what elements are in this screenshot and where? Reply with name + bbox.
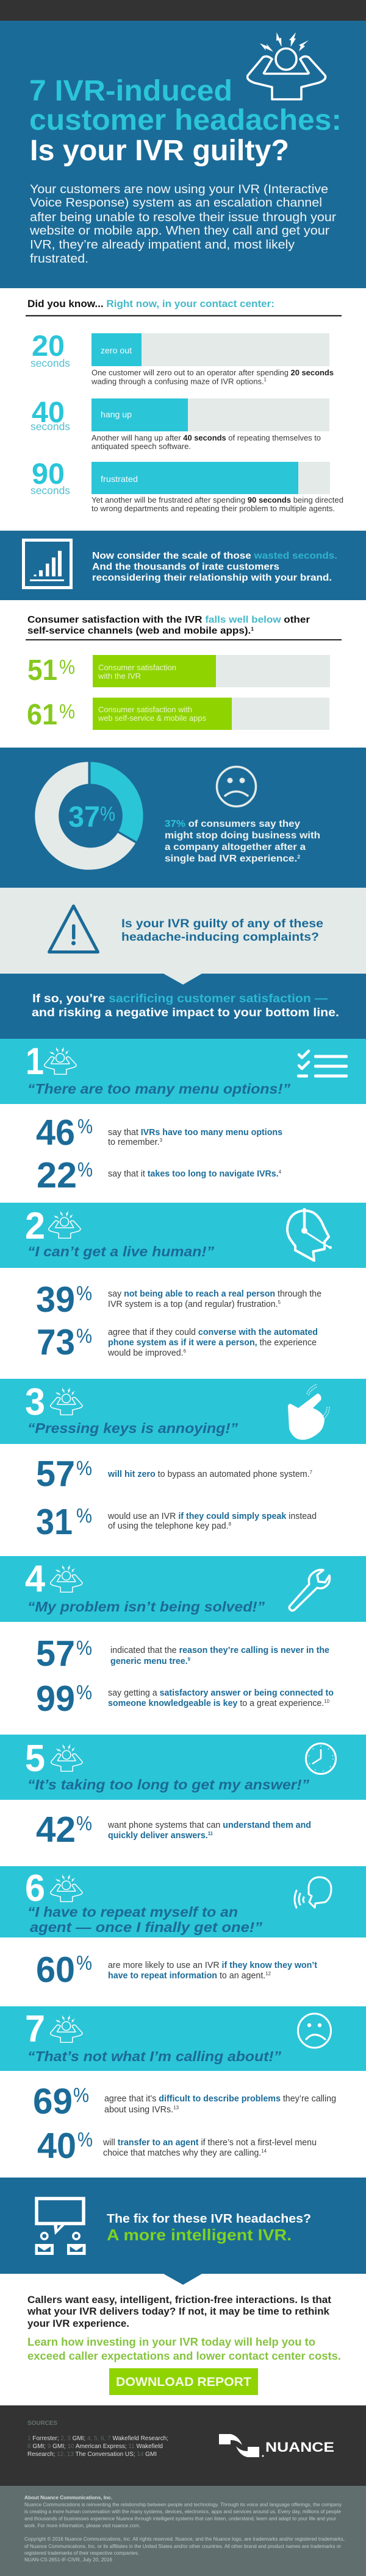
text: about body: Nuance Communications is reinventing the relationship between people and technology. Through its voice and language offerings, the company: [24, 2502, 342, 2508]
stat: 60 percent: have to repeat information to an agent.: [108, 1971, 267, 1981]
stat: 40 seconds: antiquated speech software.: [92, 442, 191, 451]
icon: headache person: [247, 32, 326, 99]
text: stop doing business: single bad IVR experience.: [165, 854, 289, 864]
text: copyright: [24, 2536, 345, 2563]
stat: 73 percent: phone system as if it were a person, the experience: [108, 1338, 317, 1348]
quote 4: “My problem isn’t being solved!”: [27, 1599, 265, 1615]
text: callers want: Callers want easy, intelligent, friction-free interactions. Is that: [27, 2295, 332, 2305]
stat: 40 percent: will transfer to an agent if there’s not a first-level menu: [102, 2138, 317, 2148]
icon: warning triangle: [49, 906, 98, 952]
icon: headache: [51, 1744, 82, 1771]
stat: 42 percent: [36, 1810, 311, 1850]
stat: 57 percent menu tree: [36, 1633, 329, 1674]
stat: 99 percent: [36, 1679, 334, 1719]
stat: 69 percent: 69: [33, 2081, 73, 2121]
title: customer headaches:: [29, 104, 342, 136]
stat: 46 percent: 3: [160, 1138, 163, 1143]
text: copyright: Copyright © 2016 Nuance Communications, Inc. All rights reserved. Nuance, and the Nuance logo, are trademarks and/or registered trademarks,: [24, 2536, 345, 2542]
stat: 99 percent: 99: [36, 1679, 75, 1719]
stat: 40 seconds: Another will hang up after 40 seconds of repeating themselves to: [92, 433, 321, 442]
stat: 99 percent: 10: [324, 1699, 330, 1704]
stat: 57 percent bypass: will hit zero to bypass an automated phone system.: [108, 1470, 312, 1479]
intro text: Voice Response) system as an escalation channel: [30, 196, 322, 210]
bar: 51 percent: Consumer satisfaction: [98, 663, 176, 672]
donut chart: 37 percent: 37: [68, 801, 100, 833]
panel: sources: [0, 2405, 366, 2486]
heading: sources: SOURCES: [27, 2419, 57, 2427]
icon: headache: [51, 1387, 82, 1415]
icon: headache: [45, 1047, 76, 1074]
panel: about and legal: [0, 2486, 366, 2576]
stat: 39 percent: %: [76, 1282, 92, 1304]
icon: bar chart: [23, 540, 71, 587]
stat: 40 seconds: 40: [32, 397, 65, 429]
stat: 69 percent: about using IVRs.: [104, 2105, 174, 2115]
text: about body: is creating a more human conversation with the many systems, devices, electronics, apps and services around us. Every day, millions of people: [24, 2508, 341, 2514]
text: wasted seconds: And the thousands of irate customers: [92, 562, 279, 572]
stat: 22 percent: [37, 1155, 282, 1195]
stat: 99 percent: %: [76, 1681, 92, 1704]
stat: 90 seconds: to wrong departments and repeating their problem to multiple agents.: [92, 504, 335, 513]
text: learn how: [27, 2335, 341, 2362]
stat: 20 seconds: wading through a confusing maze of IVR options.: [92, 377, 264, 386]
stat: 57 percent bypass: 57: [36, 1454, 75, 1494]
stat: 99 percent: say getting a satisfactory answer or being connected to: [108, 1688, 334, 1698]
stat: 40 percent: choice that matches why they are calling.: [103, 2148, 264, 2158]
text: sacrificing satisfaction: [32, 992, 339, 1019]
panel: complaint 3: [0, 1379, 366, 1444]
text: learn how: exceed caller expectations and lower contact center costs.: [27, 2349, 341, 2362]
panel: complaint 5: [0, 1735, 366, 1800]
panel: complaint 6: [0, 1866, 366, 1937]
quote 7: “That’s not what I’m calling about!”: [27, 2048, 281, 2064]
text: stop doing business: a company altogether after a: [165, 842, 306, 852]
quote 3: “Pressing keys is annoying!”: [27, 1420, 238, 1436]
text: learn how: Learn how investing in your IVR today will help you to: [27, 2335, 315, 2348]
stat: 42 percent: 42: [36, 1810, 76, 1850]
stat: 90 seconds: seconds: [30, 484, 70, 497]
text: is your IVR guilty: headache-inducing complaints?: [121, 930, 319, 944]
icon: headache: [51, 2015, 82, 2042]
stat: 40 seconds: hang up: [101, 409, 132, 419]
text: about body: [24, 2502, 342, 2528]
bar: 51 percent: [27, 654, 330, 687]
stat: 57 percent menu tree: indicated that the reason they’re calling is never in the: [110, 1646, 329, 1655]
panel: complaint 7: [0, 2006, 366, 2071]
text: stop doing business: [165, 819, 320, 864]
text: the fix: A more intelligent IVR.: [107, 2226, 292, 2244]
icon: sad face: [217, 766, 256, 807]
icon: headache: [51, 1565, 82, 1592]
icon: checklist: [297, 1051, 348, 1077]
text: stop doing business: 37% of consumers say they: [165, 819, 300, 829]
quote 5: “It’s taking too long to get my answer!”: [27, 1777, 309, 1792]
number 4: 4: [25, 1558, 45, 1600]
stat: 40 percent: 40: [37, 2126, 76, 2166]
stat: 20 seconds: zero out: [101, 345, 132, 355]
icon: clock: [306, 1744, 336, 1774]
text: copyright: registered trademarks of their respective companies.: [24, 2550, 139, 2556]
panel: complaint 2: [0, 1203, 366, 1268]
stat: 22 percent: 22: [37, 1155, 77, 1195]
text: wasted seconds: Now consider the scale of those wasted seconds.: [92, 551, 337, 561]
button: download report: [109, 2368, 258, 2395]
panel: the fix: [0, 2178, 366, 2285]
stat: 20 seconds: 20: [32, 330, 65, 363]
text: the fix: The fix for these IVR headaches?: [107, 2212, 311, 2226]
stat: 69 percent: 13: [173, 2105, 179, 2111]
text: stop doing business: might stop doing business with: [165, 830, 320, 841]
text: source list: Research; 12, 13 The Conversation US; 14 GMI: [27, 2450, 157, 2458]
bar: 61 percent: 61: [27, 699, 57, 731]
stat: 60 percent: 60: [36, 1950, 75, 1990]
stat: 73 percent: %: [76, 1325, 92, 1347]
panel: wasted seconds: [0, 531, 366, 600]
stat: 20 seconds: One customer will zero out to an operator after spending 20 seconds: [92, 368, 334, 377]
stat: 69 percent: %: [73, 2084, 89, 2106]
number 2: 2: [25, 1205, 45, 1247]
panel: sacrificing customer satisfaction: [0, 974, 366, 1039]
button: download report: DOWNLOAD REPORT: [116, 2375, 251, 2389]
stat: 99 percent: someone knowledgeable is key to a great experience.: [108, 1699, 326, 1708]
stat: 90 seconds: frustrated: [101, 474, 138, 484]
stat: 60 percent: 12: [265, 1971, 271, 1976]
stat: 73 percent: would be improved.: [108, 1348, 185, 1358]
stat: 31 percent: 31: [36, 1502, 73, 1542]
stat: 46 percent: 46: [36, 1113, 75, 1153]
stat: 22 percent: 4: [279, 1169, 282, 1175]
stat: 39 percent: say not being able to reach a real person through the: [108, 1289, 321, 1299]
text: copyright: of Nuance Communications, Inc. or its affiliates in the United States and/or other countries. All other brand and product names are trademarks or: [24, 2543, 341, 2549]
stat: 60 percent: [36, 1950, 317, 1990]
number 7: 7: [25, 2008, 45, 2050]
text: source list: 8 GMI; 9 GMI; 10 American Express; 11 Wakefield: [27, 2443, 163, 2450]
stat: 57 percent menu tree: generic menu tree.: [110, 1657, 189, 1666]
stat: 57 percent bypass: 7: [310, 1470, 313, 1475]
icon: pressing finger: [288, 1384, 329, 1440]
title: [29, 75, 342, 167]
icon: speech bubble and people: [35, 2198, 85, 2255]
quote 6: [27, 1904, 262, 1935]
stat: 73 percent: agree that if they could converse with the automated: [108, 1328, 318, 1337]
quote 1: “There are too many menu options!”: [27, 1081, 290, 1097]
heading: consumer satisfaction: 1: [251, 626, 254, 632]
text: wasted seconds: [92, 551, 337, 583]
icon: headache: [51, 1874, 82, 1902]
text: callers want: [27, 2295, 332, 2329]
stat: 39 percent: [36, 1279, 321, 1320]
stat: 57 percent menu tree: %: [76, 1637, 92, 1659]
heading: consumer satisfaction: [27, 615, 310, 636]
stat: 46 percent: [36, 1113, 282, 1153]
stat: 60 percent: %: [76, 1951, 92, 1974]
number 6: 6: [25, 1867, 45, 1909]
stat: 31 percent: 8: [229, 1521, 232, 1527]
panel: complaint 4: [0, 1556, 366, 1622]
stat: 46 percent: %: [77, 1115, 93, 1138]
quote 6: agent — once I finally get one!”: [30, 1919, 262, 1935]
stat: 20 seconds: seconds: [30, 357, 70, 369]
panel: 37 percent: [0, 748, 366, 888]
stat: 42 percent: quickly deliver answers.: [108, 1831, 210, 1841]
stat: 40 percent: %: [77, 2128, 93, 2151]
text: the fix: [107, 2212, 311, 2244]
text: about heading: About Nuance Communications, Inc.: [24, 2494, 112, 2500]
text: sacrificing satisfaction: If so, you’re sacrificing customer satisfaction —: [32, 992, 328, 1005]
stat: 22 percent: %: [77, 1158, 93, 1181]
stat: 42 percent: %: [76, 1812, 92, 1835]
icon: wrench: [289, 1569, 329, 1611]
stat: 20 seconds: 1: [264, 377, 267, 383]
stat: 57 percent bypass: %: [76, 1457, 92, 1479]
heading: consumer satisfaction: Consumer satisfaction with the IVR falls well below other: [27, 615, 310, 625]
stat: 39 percent: IVR system is a top (and regular) frustration.: [108, 1300, 281, 1309]
stat: 90 seconds: 90: [32, 458, 65, 490]
stat: 57 percent menu tree: 9: [188, 1657, 191, 1662]
stat: 57 percent menu tree: 57: [36, 1633, 75, 1674]
stat: 40 seconds: [30, 397, 329, 451]
panel: consumer satisfaction: [26, 615, 342, 731]
intro text: after being unable to resolve their issue through your: [30, 210, 336, 224]
stat: 57 percent bypass: [36, 1454, 313, 1494]
number 5: 5: [25, 1738, 45, 1780]
bar: 51 percent: with the IVR: [98, 671, 141, 681]
panel: did you know: [26, 299, 343, 513]
bar: 61 percent: %: [59, 700, 75, 723]
intro text: [29, 182, 336, 266]
stat: 46 percent: say that IVRs have too many menu options: [108, 1128, 282, 1138]
icon: sad face: [298, 2014, 331, 2048]
stat: 73 percent: 6: [184, 1348, 187, 1354]
title: Is your IVR guilty?: [30, 135, 289, 167]
stat: 40 seconds: seconds: [30, 420, 70, 433]
stat: 39 percent: 39: [36, 1279, 75, 1320]
text: source list: [27, 2435, 168, 2458]
stat: 42 percent: want phone systems that can understand them and: [107, 1821, 311, 1830]
icon: headache: [49, 1211, 81, 1238]
title: 7 IVR-induced: [29, 75, 232, 107]
text: about body: and thousands of businesses experience Nuance through intelligent systems that can listen, understand, learn and adapt to your life and your: [24, 2515, 336, 2521]
stat: 73 percent: 73: [37, 1322, 75, 1362]
text: wasted seconds: reconsidering their relationship with your brand.: [92, 573, 332, 583]
bar: 61 percent: Consumer satisfaction with: [98, 705, 192, 714]
bar: 61 percent: [27, 698, 329, 731]
intro text: Your customers are now using your IVR (Interactive: [30, 182, 328, 196]
stat: 40 percent: 14: [261, 2148, 267, 2154]
text: stop doing business: 2: [297, 854, 301, 860]
bar: 61 percent: web self-service & mobile apps: [98, 713, 206, 723]
text: callers want: what your IVR delivers today? If not, it may be time to rethink: [27, 2306, 330, 2317]
logo: nuance: NUANCE: [265, 2440, 334, 2455]
stat: 90 seconds: [30, 458, 343, 513]
text: copyright: NUAN-CS-2651-IF-CIVR, July 20, 2016: [24, 2557, 112, 2563]
text: is your IVR guilty: [121, 917, 323, 944]
text: callers want: your IVR experience.: [27, 2318, 129, 2329]
text: is your IVR guilty: Is your IVR guilty of any of these: [121, 917, 323, 930]
stat: 31 percent: would use an IVR if they could simply speak instead: [107, 1512, 317, 1521]
quote 2: “I can’t get a live human!”: [27, 1244, 214, 1259]
stat: 39 percent: 5: [278, 1300, 281, 1305]
stat: 40 percent: [37, 2126, 317, 2166]
panel: complaint 1: [0, 1039, 366, 1104]
stat: 31 percent: [36, 1502, 317, 1542]
logo: nuance: [219, 2434, 334, 2457]
stat: 22 percent: say that it takes too long to navigate IVRs.: [108, 1169, 281, 1179]
icon: headset clock: [287, 1208, 332, 1261]
heading: did you know: Did you know... Right now, in your contact center:: [27, 299, 274, 310]
bar: 51 percent: 51: [27, 654, 57, 687]
bar: 51 percent: %: [59, 656, 75, 678]
stat: 46 percent: to remember.: [108, 1138, 160, 1147]
stat: 69 percent: agree that it’s difficult to describe problems they’re calling: [104, 2094, 336, 2104]
donut chart: 37 percent: %: [100, 802, 115, 825]
intro text: website or mobile app. When they call and get your: [29, 224, 329, 238]
text: source list: 1 Forrester; 2, 3 GMI; 4, 5, 6, 7 Wakefield Research;: [27, 2435, 168, 2442]
stat: 31 percent: %: [76, 1504, 92, 1527]
stat: 73 percent: [37, 1322, 318, 1362]
stat: 69 percent: [33, 2081, 336, 2121]
stat: 60 percent: are more likely to use an IVR if they know they won’t: [108, 1961, 317, 1970]
text: about body: work. For more information, please visit nuance.com.: [24, 2522, 140, 2528]
stat: 90 seconds: Yet another will be frustrated after spending 90 seconds being directed: [92, 495, 343, 504]
number 1: 1: [26, 1041, 44, 1083]
intro text: IVR, they’re already impatient and, most likely: [30, 238, 295, 252]
number 3: 3: [25, 1381, 45, 1423]
heading: consumer satisfaction: self-service channels (web and mobile apps).: [27, 626, 237, 636]
panel: header: [0, 21, 366, 288]
intro text: frustrated.: [30, 252, 88, 266]
quote 6: “I have to repeat myself to an: [27, 1904, 238, 1920]
donut chart: 37 percent: [35, 762, 143, 869]
stat: 20 seconds: [30, 330, 334, 386]
stat: 42 percent: 11: [208, 1831, 214, 1836]
top dark bar: [0, 0, 366, 21]
text: sacrificing satisfaction: and risking a negative impact to your bottom line.: [32, 1006, 339, 1019]
stat: 31 percent: of using the telephone key pad.: [108, 1521, 231, 1531]
icon: speaking head: [295, 1877, 331, 1908]
panel: complaints question: [0, 888, 366, 974]
